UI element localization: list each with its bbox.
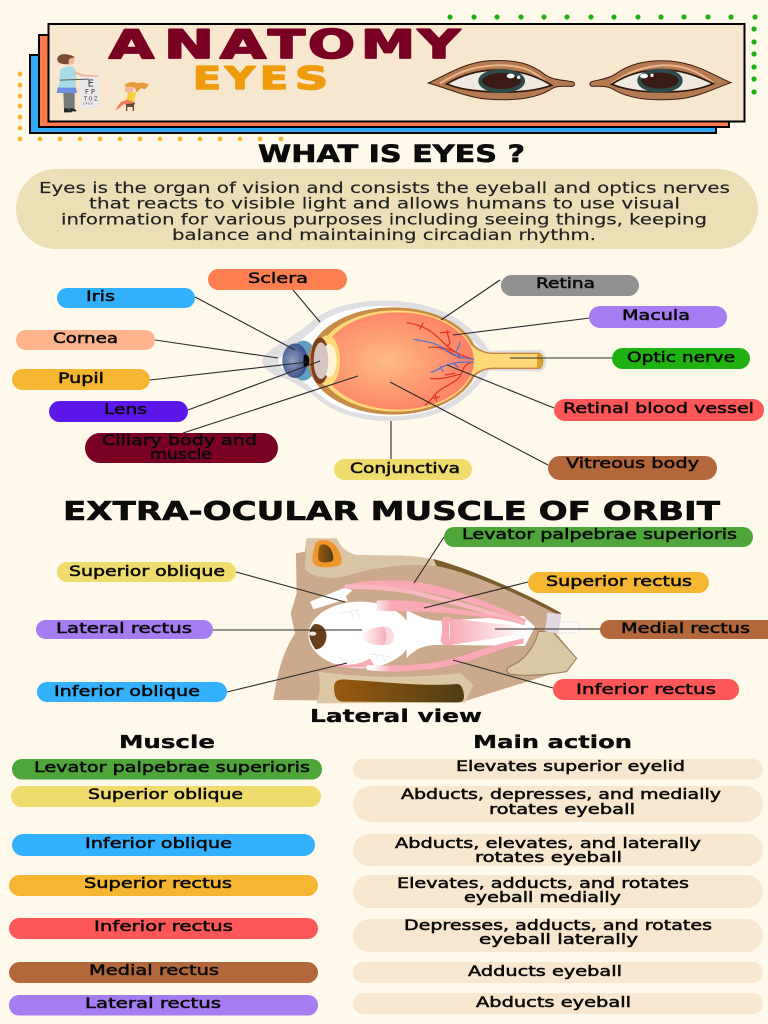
leader lines	[213, 537, 600, 692]
table column heading: main action: Main action	[473, 732, 632, 753]
title: ANATOMY: M	[361, 23, 415, 68]
label: Retina	[501, 275, 639, 296]
icon: left eye	[428, 60, 575, 100]
label: Sclera: Sclera	[248, 271, 308, 287]
label: Macula	[589, 306, 727, 328]
table row: medial rectus	[9, 962, 763, 983]
title: EYES: Y	[224, 61, 256, 97]
title: ANATOMY: Y	[417, 23, 461, 68]
label: Levator palpebrae superioris	[444, 527, 753, 547]
label: Conjunctiva: Conjunctiva	[350, 461, 460, 477]
table row: lateral rectus: Lateral rectus	[85, 996, 221, 1012]
label: Superior oblique: Superior oblique	[69, 564, 225, 580]
label: Conjunctiva	[334, 459, 472, 480]
leader lines	[150, 280, 612, 465]
definition text: Eyes is the organ of vision and consists the eyeball and optics nerves	[39, 179, 730, 197]
label: Ciliary body and muscle	[85, 433, 278, 463]
eyeball illustration	[262, 301, 546, 421]
label: Iris	[57, 288, 195, 308]
table row: superior rectus: Superior rectus	[84, 876, 232, 892]
table row: inferior rectus: Inferior rectus	[94, 919, 233, 935]
table row: superior oblique: Abducts, depresses, and medially	[401, 787, 721, 803]
table row: inferior oblique: rotates eyeball	[475, 850, 622, 866]
icon: doctor with eye chart: L P E D	[83, 101, 93, 105]
definition text: information for various purposes including seeing things, keeping	[61, 210, 707, 228]
table row: lateral rectus: Abducts eyeball	[476, 995, 631, 1011]
caption: lateral view: Lateral view	[310, 706, 482, 727]
heading: what is eyes: WHAT IS EYES ?	[258, 140, 525, 168]
icon: doctor with eye chart: F P	[85, 88, 95, 96]
label: Inferior rectus: Inferior rectus	[576, 682, 716, 698]
label: Superior oblique	[57, 562, 236, 582]
title: EYES: E	[260, 61, 288, 97]
heading: extra-ocular muscle of orbit: EXTRA-OCULAR MUSCLE OF ORBIT	[63, 497, 720, 527]
label: Cornea	[16, 330, 155, 350]
label: Vitreous body: Vitreous body	[566, 456, 699, 472]
table row: levator palpebrae superioris: Levator palpebrae superioris	[34, 760, 310, 776]
table row: superior rectus: Elevates, adducts, and rotates	[397, 876, 689, 892]
yellow dotted border	[18, 72, 283, 141]
table row: levator palpebrae superioris	[12, 759, 763, 780]
label: Lateral rectus: Lateral rectus	[56, 621, 192, 637]
label: Macula: Macula	[622, 308, 690, 324]
diagram: lateral view of orbit	[36, 527, 768, 703]
table row: medial rectus: Medial rectus	[89, 963, 219, 979]
title: ANATOMY: O	[308, 23, 355, 68]
definition text: that reacts to visible light and allows humans to use visual	[89, 194, 680, 212]
icon: child on chair	[114, 82, 149, 111]
cream front card	[48, 24, 744, 122]
label: Superior rectus	[528, 572, 709, 593]
label: Retinal blood vessel	[554, 399, 764, 421]
table row: superior rectus: eyeball medially	[464, 890, 621, 906]
header banner	[18, 14, 758, 141]
label: Iris: Iris	[86, 289, 115, 305]
label: Inferior oblique	[37, 682, 227, 702]
label: Medial rectus: Medial rectus	[621, 621, 750, 637]
icon: doctor with eye chart	[57, 54, 99, 112]
label: Superior rectus: Superior rectus	[546, 574, 692, 590]
table row: superior oblique: Superior oblique	[88, 787, 243, 803]
title: EYES: S	[295, 61, 328, 97]
icon: doctor with eye chart: T O Z	[83, 96, 98, 102]
label: Retina: Retina	[536, 276, 595, 292]
table row: superior rectus	[9, 875, 763, 908]
table row: inferior rectus: Depresses, adducts, and rotates	[404, 918, 712, 934]
label: Inferior oblique: Inferior oblique	[54, 684, 200, 700]
orange middle card	[39, 35, 729, 127]
table row: superior oblique: rotates eyeball	[489, 802, 635, 818]
definition text: balance and maintaining circadian rhythm.	[172, 226, 596, 244]
table row: inferior oblique: Inferior oblique	[85, 836, 232, 852]
label: Retinal blood vessel: Retinal blood vessel	[563, 401, 754, 417]
icon: right eye	[590, 61, 732, 100]
diagram: eye cross-section	[12, 269, 764, 480]
label: Optic nerve: Optic nerve	[627, 350, 735, 366]
label: Optic nerve	[612, 348, 750, 369]
label: Vitreous body	[548, 456, 717, 480]
title: ANATOMY	[109, 23, 461, 68]
table row: inferior oblique: Abducts, elevates, and laterally	[395, 836, 701, 852]
label: Medial rectus	[600, 620, 768, 639]
label: Sclera	[208, 269, 347, 290]
table row: inferior rectus: eyeball laterally	[479, 932, 638, 948]
definition text	[39, 179, 730, 244]
orbit illustration	[273, 538, 580, 703]
label: Lens: Lens	[104, 402, 147, 418]
blue back card	[30, 55, 716, 133]
table row: inferior oblique	[12, 834, 763, 866]
table row: lateral rectus	[9, 993, 763, 1016]
title: EYES: E	[193, 61, 221, 97]
table column heading: muscle: Muscle	[119, 732, 215, 753]
label: Lens	[49, 401, 188, 422]
label: Levator palpebrae superioris: Levator palpebrae superioris	[462, 527, 737, 543]
table row: medial rectus: Adducts eyeball	[468, 964, 622, 980]
label: Pupil: Pupil	[58, 371, 104, 387]
table row: inferior rectus	[9, 918, 763, 952]
label: Inferior rectus	[553, 679, 739, 700]
title: ANATOMY: A	[109, 23, 154, 68]
label: Ciliary body and muscle: muscle	[150, 447, 212, 463]
label: Cornea: Cornea	[53, 331, 118, 347]
title: EYES	[193, 61, 328, 97]
panel: definition	[16, 169, 758, 249]
label: Lateral rectus	[36, 620, 213, 639]
icon: doctor with eye chart: E	[88, 79, 94, 90]
label: Pupil	[12, 369, 150, 390]
table row: levator palpebrae superioris: Elevates superior eyelid	[456, 759, 685, 775]
title: ANATOMY: A	[220, 23, 266, 68]
title: ANATOMY: N	[164, 23, 214, 68]
table row: superior oblique	[11, 786, 763, 822]
label: Ciliary body and muscle: Ciliary body and	[102, 433, 257, 449]
green dotted border	[447, 14, 758, 95]
title: ANATOMY: T	[268, 23, 306, 68]
